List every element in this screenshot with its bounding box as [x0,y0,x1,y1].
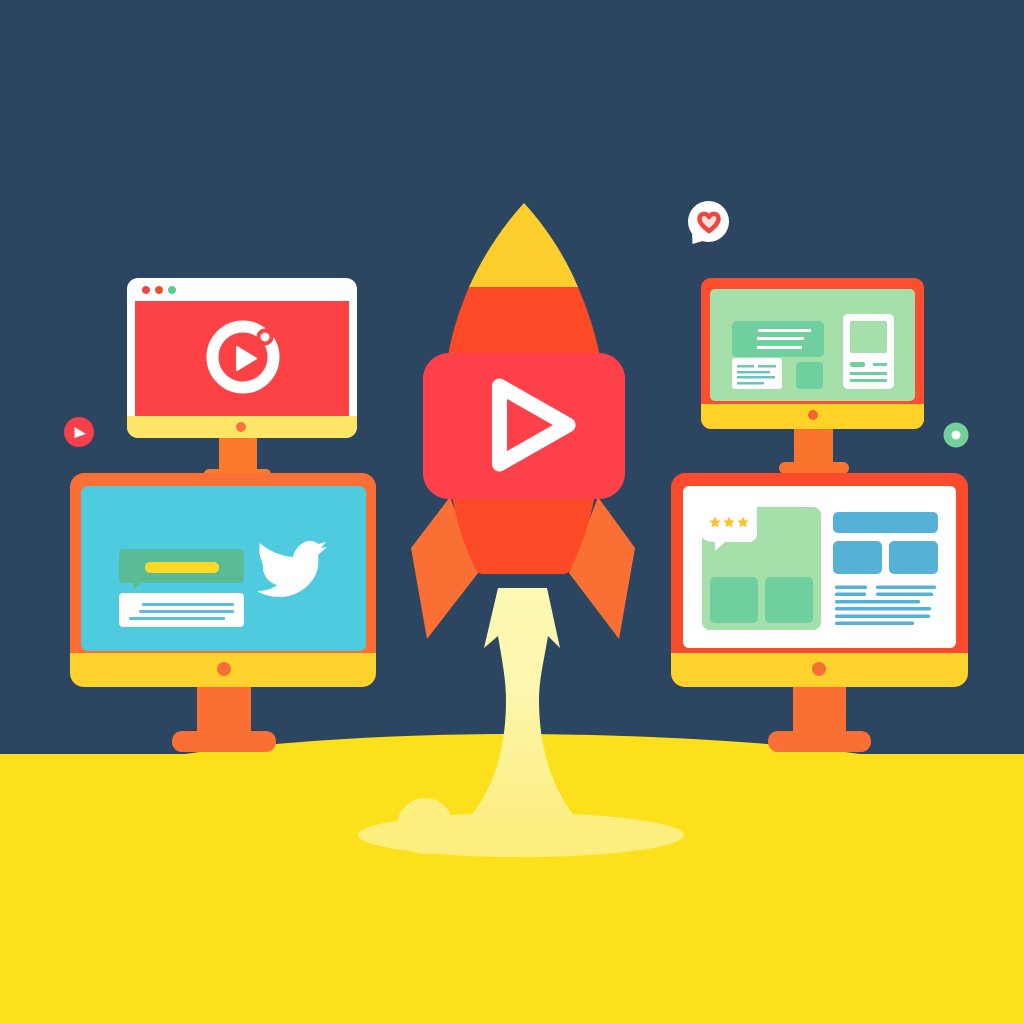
icon: bird [257,541,327,597]
icon: green dot [944,422,968,448]
top right monitor stand [779,428,849,474]
rocket left fin [411,497,478,639]
bottom right monitor stand [768,686,871,752]
monitor: top right layout [701,278,924,429]
monitor: top left video player [127,278,357,438]
ground [0,734,1024,1024]
bottom left monitor stand [172,686,276,752]
rocket [411,203,635,639]
play panel [423,353,625,499]
top left monitor stand [204,436,271,481]
rocket body [448,287,600,574]
monitor: bottom left social [70,473,376,687]
rocket right fin [569,497,635,639]
icon: small red play [64,417,94,447]
icon: heart bubble [688,201,729,244]
monitor: bottom right web page [671,473,968,687]
rocket exhaust [358,588,684,857]
play icon [500,386,568,464]
rocket nose [469,203,578,287]
